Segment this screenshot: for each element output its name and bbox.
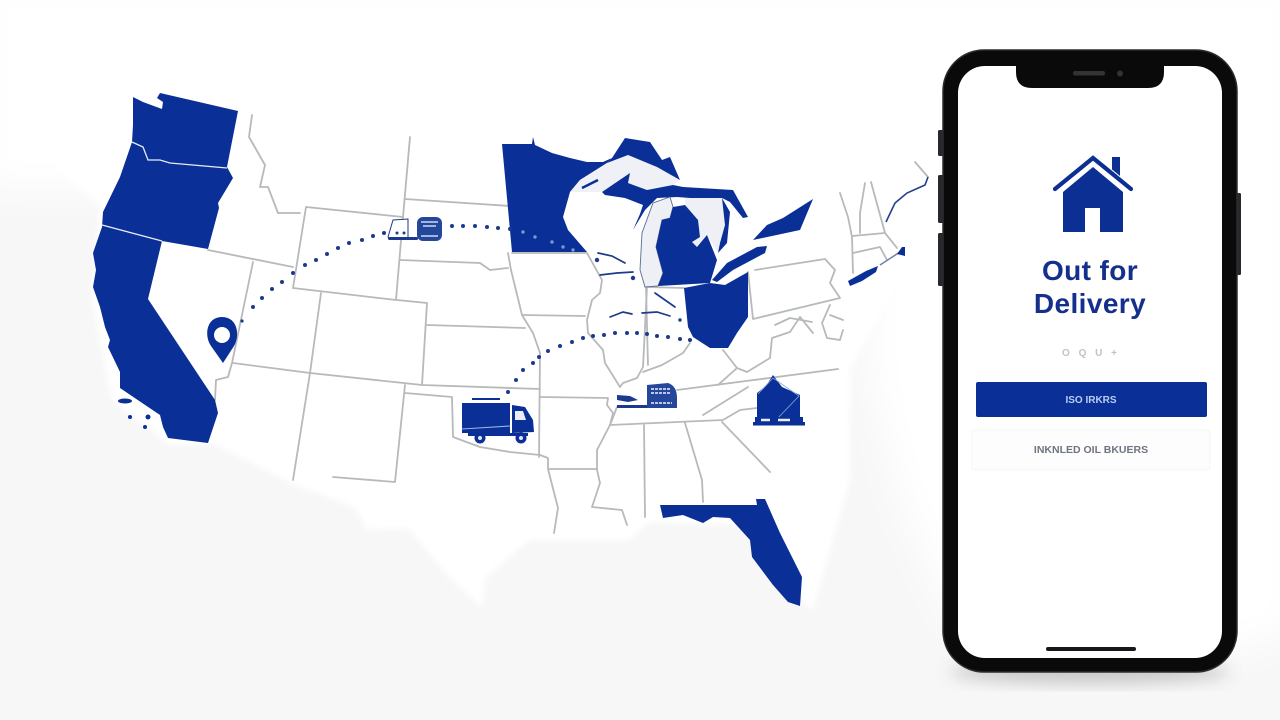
map: northeast coast — [848, 177, 928, 286]
secondary button: INKNLED OIL BKUERS — [1034, 444, 1148, 456]
map: Minnesota — [502, 137, 612, 252]
Lake Huron — [685, 198, 727, 253]
map: Ohio — [684, 272, 748, 348]
map: Washington, Oregon and California — [93, 93, 238, 443]
map: river fragments — [598, 253, 675, 317]
icon: warehouse — [753, 375, 805, 426]
north shore of Lake Superior — [607, 138, 680, 180]
phone — [938, 50, 1241, 684]
side buttons — [938, 130, 1241, 286]
small status text: O Q U + — [1062, 348, 1120, 359]
phone body — [943, 50, 1237, 672]
home indicator — [1046, 647, 1136, 651]
Upper Peninsula — [602, 173, 748, 230]
phone shadow — [950, 660, 1230, 684]
primary button — [976, 382, 1207, 417]
speaker and camera — [1073, 70, 1123, 76]
icon: small truck in Kentucky — [617, 383, 677, 408]
map: state borders — [208, 115, 928, 533]
sliver in Lake Superior — [582, 180, 598, 188]
map: Great Lakes and Michigan — [570, 138, 813, 287]
Lake Michigan — [640, 197, 673, 287]
icon: house — [1054, 157, 1132, 232]
Lake Superior — [570, 155, 680, 192]
phone notch — [1016, 66, 1164, 88]
icon: location pin — [207, 317, 237, 363]
route: pin to Minnesota dotted line — [240, 224, 682, 323]
heading: out for delivery: Out for — [1042, 255, 1138, 286]
secondary button — [972, 430, 1210, 470]
primary button: ISO IRKRS — [1065, 395, 1117, 406]
Lake Erie shore — [712, 246, 767, 282]
icon: delivery truck in Oklahoma — [462, 398, 534, 444]
phone screen — [958, 66, 1222, 658]
route: truck to Ohio dotted line — [506, 331, 692, 394]
Lower Michigan — [656, 205, 717, 286]
icon: small truck in Wyoming — [388, 217, 442, 241]
phone: Delivery — [1034, 288, 1146, 319]
Ontario shore — [753, 199, 813, 240]
map: Florida — [660, 499, 802, 606]
